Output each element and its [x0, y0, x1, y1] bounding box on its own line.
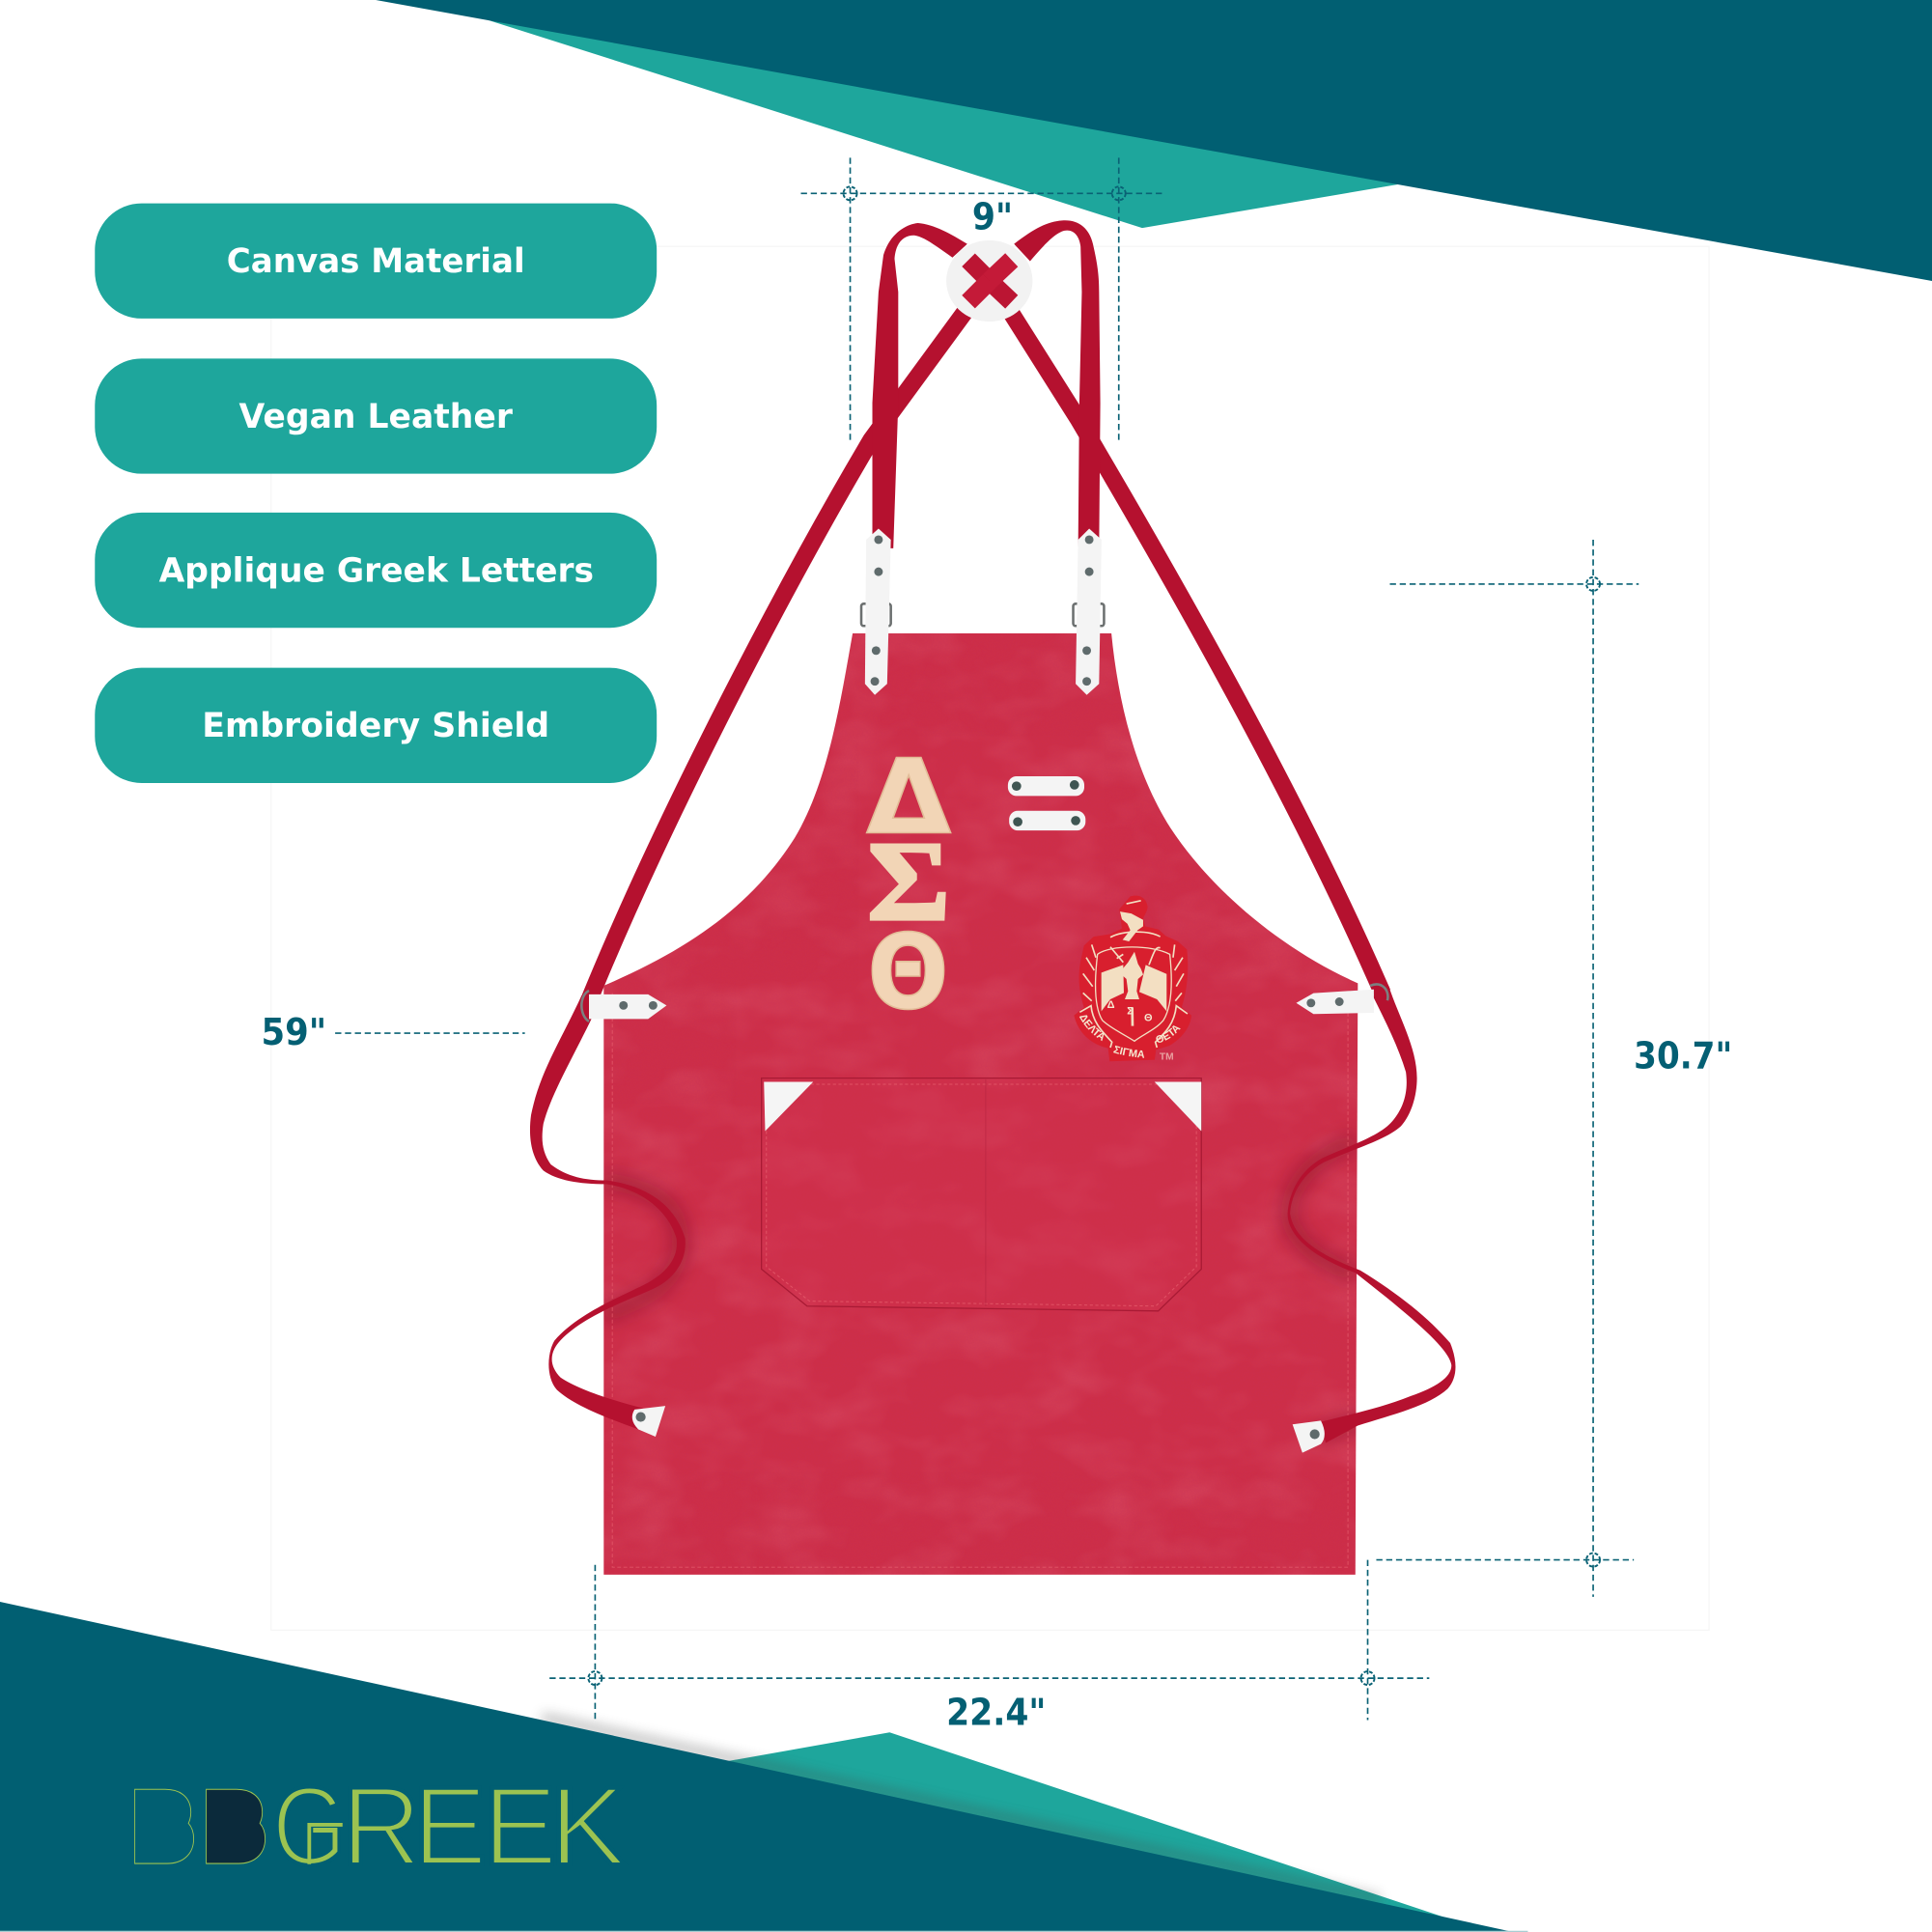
- waist tie left: [530, 995, 686, 1437]
- pocket: [762, 1078, 1201, 1311]
- red silhouette: [1074, 896, 1191, 1061]
- applique greek letters: [866, 739, 951, 1033]
- figure face and shoulders: [1120, 911, 1143, 941]
- pill: applique greek letters: Applique Greek Letters: [159, 551, 594, 590]
- logo letter G: G: [272, 1765, 347, 1889]
- bottom edge line: [0, 1931, 1527, 1932]
- apron body: [592, 622, 1368, 1583]
- pocket corner right: [1155, 1081, 1201, 1132]
- torch handle: [1129, 1007, 1136, 1026]
- banner text: ΔΕΛΤΑ: [1079, 1015, 1105, 1041]
- shield cream fields: [1102, 965, 1166, 1011]
- pill: canvas material: [95, 204, 657, 319]
- letter theta: Θ: [867, 913, 949, 1033]
- logo: BBGREEK: [138, 1765, 626, 1889]
- pill: applique greek letters: [95, 513, 657, 628]
- letter sigma: Σ: [867, 819, 950, 944]
- side tab left: [589, 994, 666, 1019]
- dimension: width 22.4 in: [549, 1560, 1429, 1735]
- logo letter K: K: [549, 1765, 626, 1889]
- side tab right: [1297, 990, 1374, 1014]
- bottom dark teal banner: [0, 1602, 1513, 1932]
- logo word REE: REE: [341, 1765, 557, 1889]
- waist tie right: [1288, 986, 1455, 1453]
- dimension: width 22.4 in: 22.4": [946, 1692, 1046, 1735]
- top light teal accent: [456, 10, 1417, 228]
- bottom banner shadow: [543, 1718, 1380, 1900]
- laurel left: [1083, 944, 1096, 1001]
- side ring left: [581, 991, 589, 1022]
- trademark: TM: [1160, 1051, 1174, 1062]
- buckle tab right: [1074, 528, 1104, 695]
- neck ring patch: [946, 240, 1032, 322]
- dimension: strap length 59 in: 59": [262, 1011, 326, 1054]
- embroidered shield crest: Σ: [1127, 1006, 1134, 1018]
- buckle tab left: [861, 528, 891, 695]
- dimension: height 30.7 in: 30.7": [1634, 1034, 1732, 1078]
- shield letters: Δ: [1107, 999, 1115, 1011]
- laurel right: [1173, 944, 1184, 1001]
- pocket corner left: [764, 1081, 813, 1132]
- logo outlined B inner: B: [138, 1781, 189, 1873]
- logo filled B base: B: [210, 1781, 261, 1873]
- feature pills: [95, 204, 657, 783]
- bottom light teal accent: [702, 1732, 1444, 1918]
- inner shield: [1096, 947, 1171, 1041]
- banner outlines: [1079, 1006, 1188, 1048]
- torch: [1122, 952, 1143, 999]
- top dark teal banner: [376, 0, 1932, 281]
- pill: vegan leather: Vegan Leather: [239, 398, 513, 436]
- dimension: strap width 9 in: [800, 157, 1164, 443]
- logo outlined B base: B: [138, 1781, 189, 1873]
- dimension: strap width 9 in: 9": [972, 195, 1013, 238]
- side ring right: [1370, 985, 1387, 1000]
- pill: vegan leather: [95, 358, 657, 474]
- pill: canvas material: Canvas Material: [227, 242, 525, 281]
- embroidered shield crest: Θ: [1144, 1012, 1153, 1023]
- strap shadow: [603, 1141, 1361, 1436]
- neck and shoulder straps: [589, 220, 1383, 1000]
- logo filled B inner: B: [210, 1781, 261, 1873]
- embroidered shield crest: [1074, 896, 1191, 1062]
- sword and cane: [1110, 947, 1161, 965]
- tie end tab: [1293, 1420, 1325, 1453]
- banner text center: ΣΙΓΜΑ: [1113, 1045, 1145, 1058]
- banner text right: ΘΕΤΑ: [1156, 1025, 1181, 1043]
- pill: embroidery shield: [95, 668, 657, 783]
- rivet bars: [1008, 776, 1085, 830]
- tie end tab: [632, 1406, 665, 1437]
- dimension: height 30.7 in: [1376, 540, 1732, 1597]
- letter delta: Δ: [866, 739, 951, 858]
- pill: embroidery shield: Embroidery Shield: [202, 707, 549, 745]
- faint product frame: [271, 246, 1709, 1630]
- logo G inner bar: [309, 1825, 343, 1864]
